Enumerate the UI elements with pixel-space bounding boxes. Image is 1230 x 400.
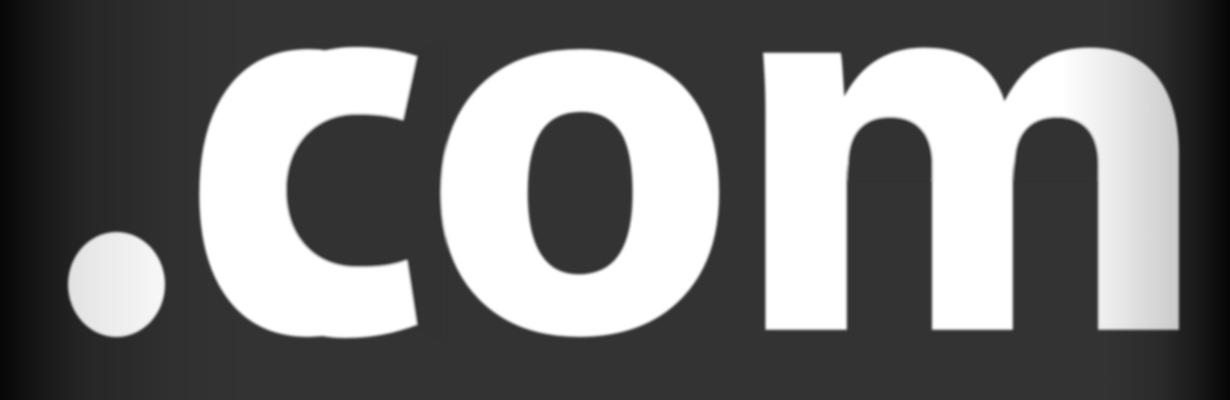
icon: round dot: . [108, 274, 116, 307]
icon: round dot [68, 232, 165, 337]
